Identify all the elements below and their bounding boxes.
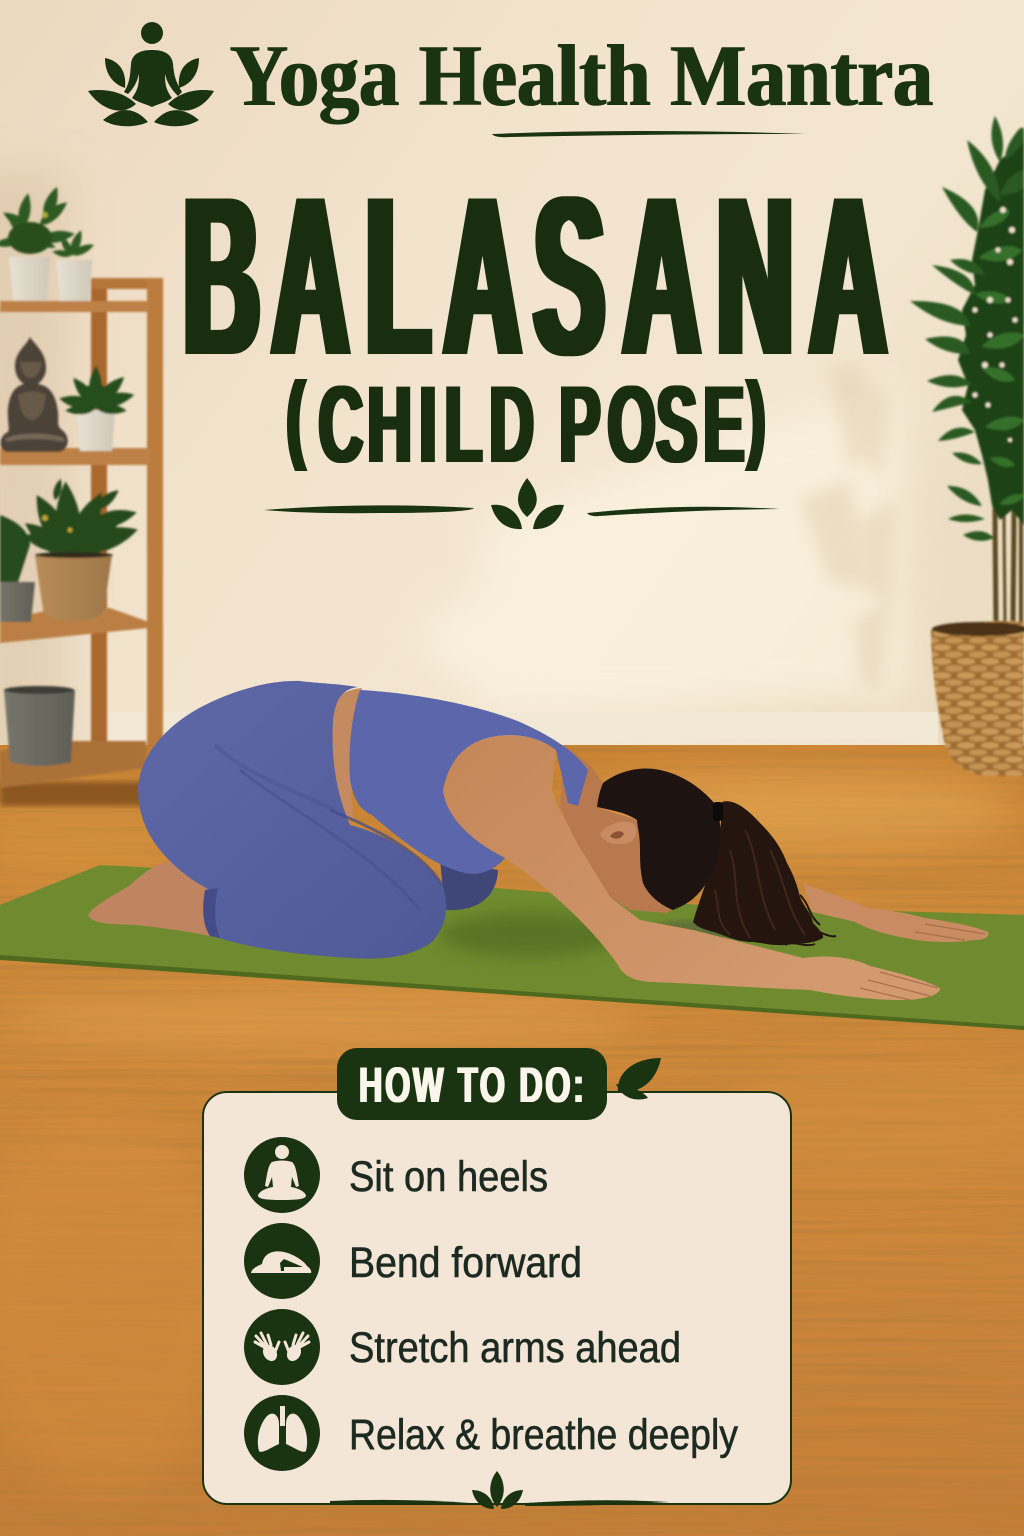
heading pill: HOW TO DO:	[359, 1057, 587, 1113]
heading leaf icon	[616, 1058, 661, 1099]
step 1 icon: seated figure	[244, 1137, 320, 1213]
step 2 icon: forward bend	[244, 1223, 320, 1299]
finger lines	[860, 924, 985, 1000]
near arm and shoulder	[443, 735, 940, 1000]
step 1 text: Sit on heels	[349, 1153, 548, 1201]
brand logo: meditating figure with leaves	[88, 22, 214, 126]
ponytail	[693, 801, 836, 945]
terracotta planter	[20, 478, 141, 621]
hair	[597, 769, 721, 910]
sunlight patches on wall	[420, 380, 910, 710]
darker wall behind shelf	[0, 170, 70, 770]
white planter middle shelf	[58, 365, 136, 451]
hair tie	[713, 802, 723, 821]
bottom leaf ornament	[330, 1471, 670, 1509]
step 4 text: Relax & breathe deeply	[349, 1411, 738, 1459]
step 3 text: Stretch arms ahead	[349, 1324, 681, 1372]
wood floor	[0, 745, 1024, 1536]
wooden shelf unit with plants	[0, 185, 163, 806]
far arm	[803, 883, 988, 942]
step 4 icon: lungs	[244, 1395, 320, 1471]
heading pill	[337, 1048, 607, 1120]
dense foliage mass	[958, 135, 1024, 525]
grey metal cylinder	[4, 686, 75, 766]
skirting board	[108, 712, 938, 746]
white planters top shelf	[0, 185, 96, 301]
buddha statue	[1, 337, 68, 452]
inner leaf texture	[974, 205, 1024, 508]
subtitle: (	[287, 362, 305, 471]
grey planter with plant	[0, 515, 35, 622]
sports top	[349, 690, 588, 874]
leggings and hips	[138, 681, 446, 959]
subtitle: CHILD POSE	[319, 362, 744, 485]
neck and face	[560, 745, 673, 913]
bare midriff	[328, 688, 362, 822]
main title: BALASANA	[183, 150, 887, 403]
brush underline under brand name	[492, 131, 806, 137]
stems	[995, 500, 1021, 632]
wall background	[0, 0, 1024, 780]
leaf shadows on wall	[800, 365, 895, 690]
bamboo plant in woven basket	[910, 116, 1024, 776]
step 3 icon: hands	[244, 1309, 320, 1385]
step 2 text: Bend forward	[349, 1239, 582, 1287]
long leaves	[910, 116, 1024, 541]
subtitle: )	[747, 362, 765, 471]
sunlit gaps in foliage	[972, 207, 1018, 442]
brand name: Yoga Health Mantra	[230, 28, 933, 125]
panel background	[203, 1092, 791, 1504]
lower torso shade	[440, 860, 498, 910]
woman in child pose	[88, 681, 988, 1000]
foot	[88, 862, 210, 936]
yoga mat	[0, 865, 1024, 1030]
leaf divider	[264, 478, 780, 529]
basket	[931, 621, 1024, 776]
how to do panel	[203, 1048, 791, 1509]
ear	[600, 822, 636, 844]
